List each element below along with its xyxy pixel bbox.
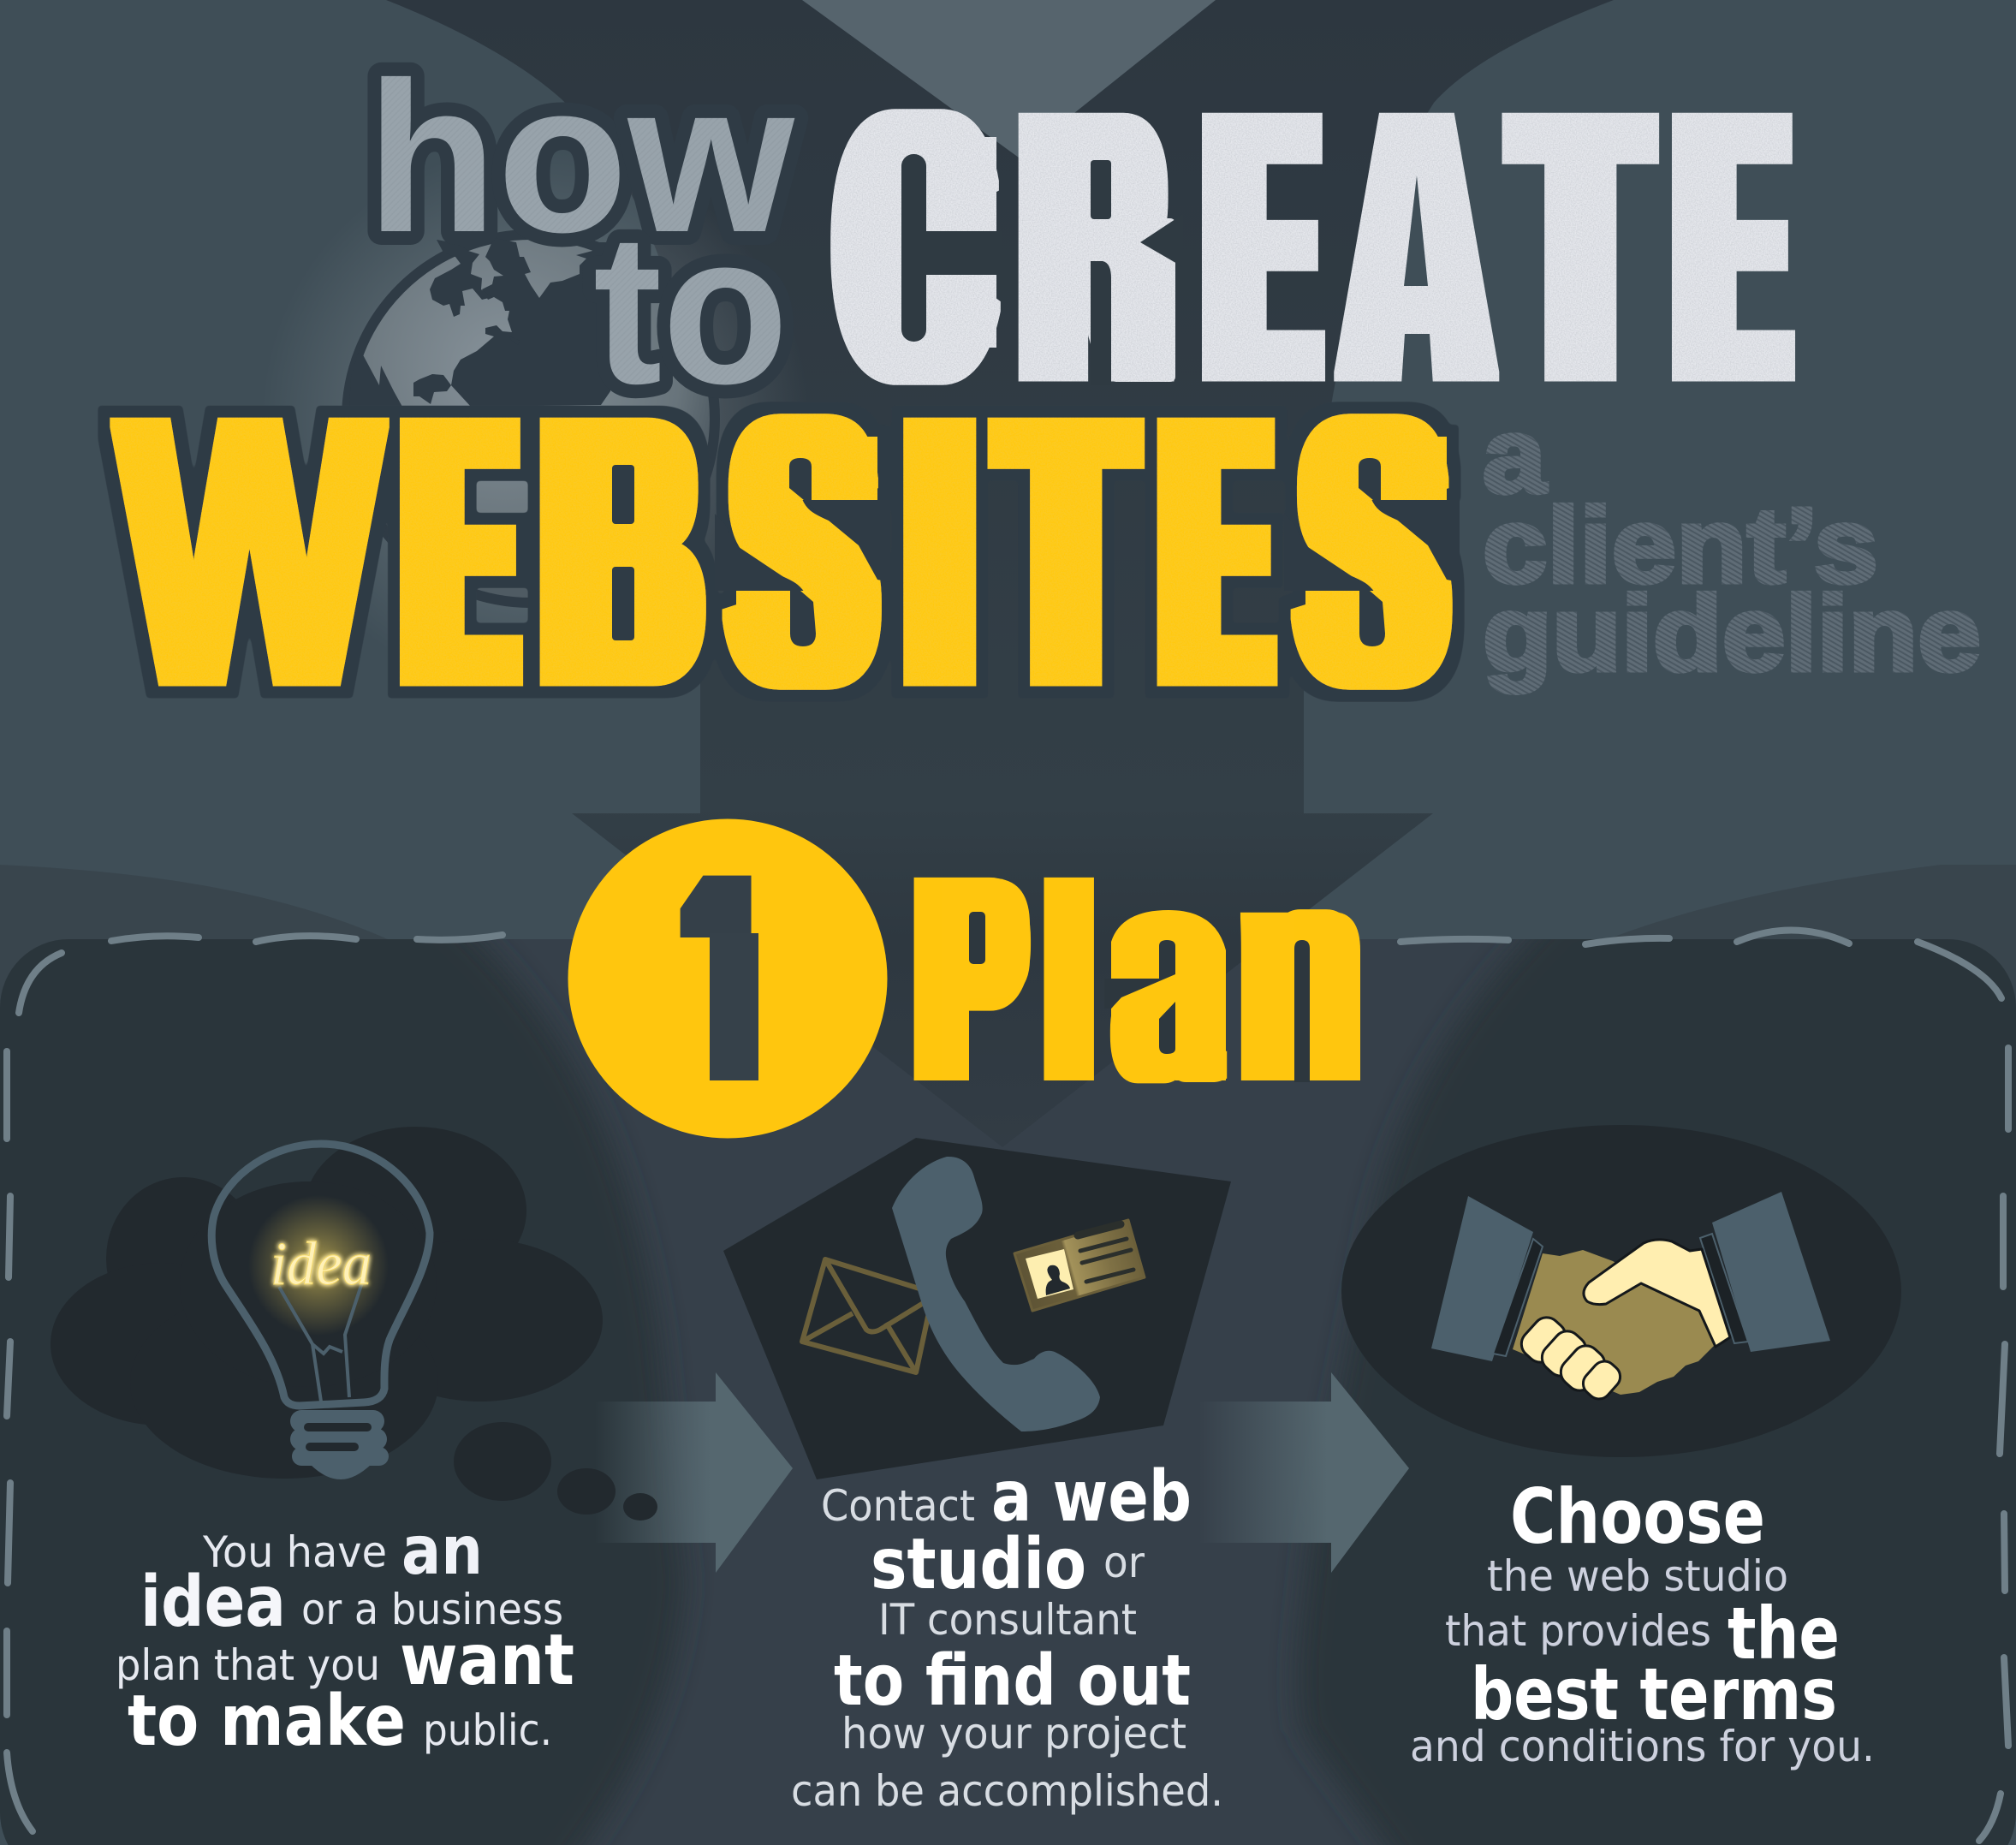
text: step one: to make bbox=[128, 1681, 406, 1762]
title: WEBSITES: E bbox=[413, 341, 506, 762]
icon: handshake bbox=[1431, 1192, 1830, 1404]
title: WEBSITES: E bbox=[1170, 342, 1261, 762]
title: CREATE: T bbox=[1522, 36, 1639, 456]
icon backdrop: handshake oval bbox=[1341, 1125, 1901, 1457]
step number circle: 1 bbox=[687, 812, 760, 1143]
text: step one bbox=[116, 1513, 574, 1762]
side lobes behind panel bbox=[0, 865, 2016, 1045]
subtitle: a client's guideline bbox=[1483, 396, 1981, 693]
title: how to: how bbox=[366, 38, 794, 277]
subtitle: a client's guideline: a bbox=[1483, 396, 1548, 515]
icon: envelope bbox=[802, 1259, 933, 1372]
title: WEBSITES: S bbox=[739, 342, 867, 762]
heading: Plan: P bbox=[916, 817, 1024, 1140]
text: idea: idea bbox=[271, 1229, 372, 1298]
text: step one: want bbox=[400, 1620, 574, 1701]
heading: Plan: a bbox=[1118, 807, 1214, 1142]
icon: ID card bbox=[1014, 1220, 1145, 1311]
title: WEBSITES counters bbox=[612, 458, 1460, 646]
heading: Plan: l bbox=[1044, 831, 1094, 1137]
text: step two: a web bbox=[991, 1456, 1192, 1538]
title: how to bbox=[366, 38, 794, 428]
subtitle: a client's guideline: guideline bbox=[1483, 574, 1981, 693]
title: WEBSITES bbox=[120, 340, 1447, 762]
text: step three: and conditions for you. bbox=[1410, 1722, 1875, 1771]
text: step two: to find out bbox=[834, 1640, 1191, 1722]
text: step three: Choose bbox=[1510, 1473, 1765, 1561]
icon: globe bbox=[261, 146, 809, 693]
arrow: step two to three bbox=[1198, 1372, 1409, 1573]
text: step three: that provides bbox=[1445, 1606, 1711, 1656]
text: step one: idea bbox=[140, 1562, 286, 1643]
title: CREATE: C bbox=[845, 37, 984, 457]
icon backdrop: contact polygon bbox=[723, 1138, 1231, 1479]
text: step one: or a business bbox=[301, 1585, 563, 1634]
text: step three: best terms bbox=[1471, 1652, 1837, 1736]
title: CREATE: A bbox=[1352, 37, 1482, 457]
title: WEBSITES: W bbox=[120, 340, 382, 762]
thought cloud bbox=[51, 1127, 657, 1521]
title: CREATE: E bbox=[1215, 36, 1308, 457]
panel: step one bbox=[0, 908, 2016, 1845]
text: step two: IT consultant bbox=[878, 1595, 1137, 1645]
big down arrow bbox=[386, 0, 1614, 1147]
title: WEBSITES: T bbox=[1008, 341, 1125, 761]
text: step two: can be accomplished. bbox=[791, 1766, 1223, 1816]
icon: phone bbox=[892, 1157, 1100, 1431]
title: CREATE counters bbox=[901, 154, 1433, 385]
arrow: step one to two bbox=[595, 1372, 793, 1573]
title: WEBSITES: S bbox=[1307, 342, 1438, 762]
panel: light top triangle bbox=[802, 0, 1216, 158]
heading: Plan: n bbox=[1240, 800, 1359, 1144]
heading: Plan bbox=[916, 800, 1360, 1144]
step number circle bbox=[568, 812, 887, 1143]
text: step three: the web studio bbox=[1487, 1551, 1788, 1601]
text: step three: the bbox=[1728, 1592, 1840, 1675]
title: CREATE: R bbox=[1029, 35, 1156, 457]
text: step two: or bbox=[1103, 1538, 1145, 1587]
text: step two: how your project bbox=[841, 1709, 1186, 1759]
title: WEBSITES: I bbox=[913, 342, 967, 762]
text: step one: You have bbox=[202, 1527, 387, 1577]
text: step one: an bbox=[401, 1513, 483, 1590]
panel dashed border bbox=[7, 930, 2008, 1841]
title: CREATE bbox=[845, 35, 1778, 457]
text: step three bbox=[1410, 1473, 1875, 1771]
title: CREATE: E bbox=[1685, 36, 1778, 457]
text: step two: Contact bbox=[821, 1481, 975, 1531]
text: step one: public. bbox=[423, 1705, 552, 1755]
text: step two: studio bbox=[871, 1524, 1086, 1605]
subtitle: a client's guideline: client’s bbox=[1483, 486, 1878, 605]
icon: light bulb bbox=[211, 1144, 430, 1479]
title: WEBSITES: B bbox=[549, 340, 693, 762]
title: how to: to bbox=[593, 189, 788, 428]
text: step one: plan that you bbox=[116, 1640, 380, 1690]
text: step two bbox=[791, 1456, 1223, 1816]
